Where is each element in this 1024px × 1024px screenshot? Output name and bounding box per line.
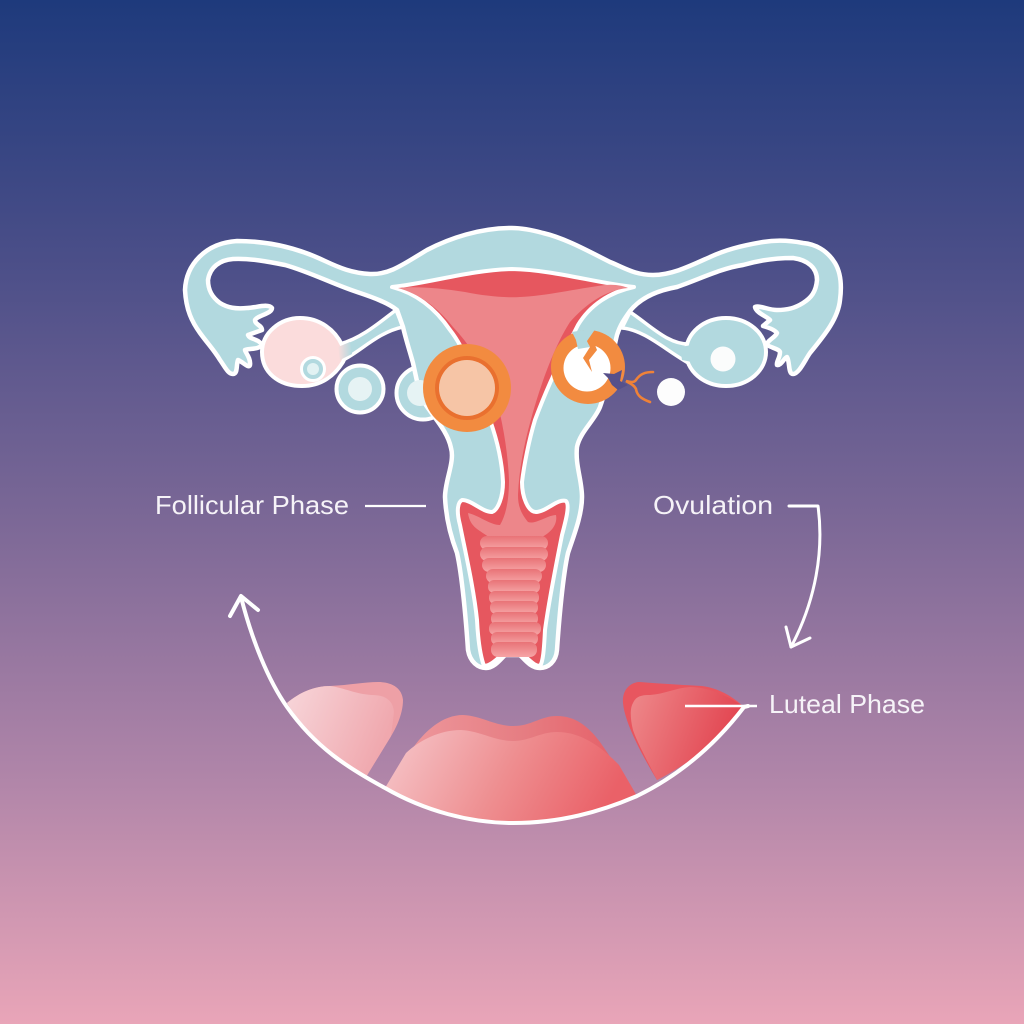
vaginal ribs [480, 536, 548, 657]
right segment [623, 682, 744, 780]
label: Follicular Phase: Follicular Phase [155, 490, 349, 520]
left ovarian ligament [340, 310, 403, 360]
left segment [287, 682, 403, 777]
right ovary junction fill [680, 345, 692, 362]
cavity dark lining [392, 269, 634, 666]
left follicle behind uterus [396, 366, 450, 420]
top gap [572, 328, 596, 349]
endometrium phases [287, 682, 744, 823]
uterus diagram [185, 228, 841, 668]
egg in right ovary [710, 346, 736, 372]
left segment lighter [287, 686, 394, 777]
free follicle [336, 366, 384, 412]
dominant orange follicle [423, 344, 511, 432]
ruptured follicle [551, 328, 653, 404]
crack [583, 341, 597, 372]
orange burst lines [626, 372, 653, 402]
label: Luteal Phase: Luteal Phase [769, 689, 925, 719]
right ovarian ligament [622, 312, 690, 364]
right segment lighter [631, 687, 744, 780]
right ovary [680, 318, 766, 386]
small follicle in ovary [302, 358, 324, 380]
uterine cavity [392, 269, 634, 666]
cavity pink inner [398, 285, 628, 540]
label: Ovulation with arrow: Ovulation [653, 490, 773, 520]
label: Ovulation with arrow [653, 490, 820, 647]
released egg [657, 378, 685, 406]
middle segment [385, 715, 637, 823]
follicle centre [407, 380, 433, 406]
left ovary [262, 318, 352, 386]
cycle arc arrow [230, 596, 748, 823]
uterus body and fallopian tubes [185, 228, 841, 668]
rupture notch [603, 370, 628, 390]
left ovary junction tint [338, 342, 352, 360]
middle segment lighter [385, 730, 637, 823]
